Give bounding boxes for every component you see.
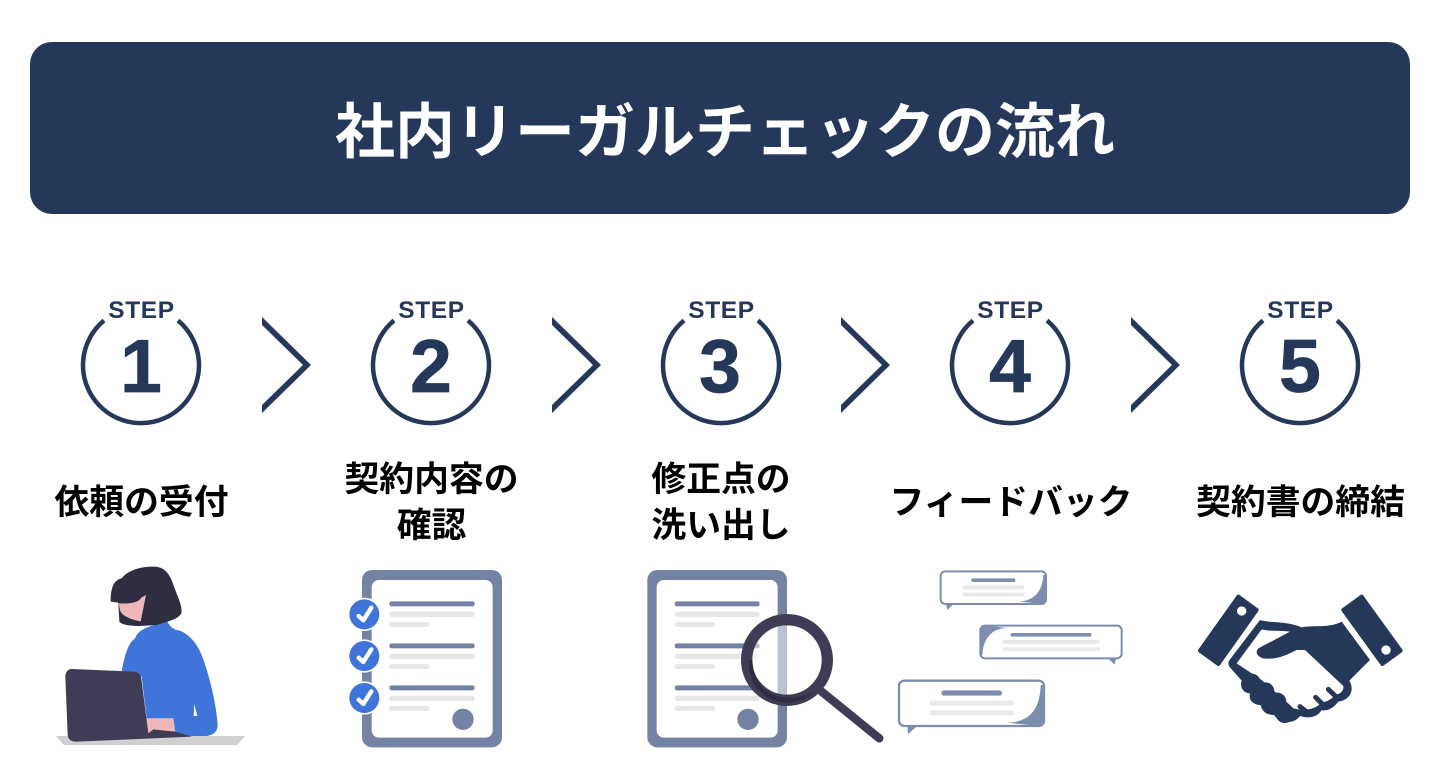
step 3 badge: 3 bbox=[699, 324, 741, 408]
label: step 2: 契約内容の bbox=[344, 460, 518, 499]
step 2 badge bbox=[373, 297, 489, 423]
icon: document with magnifier bbox=[647, 570, 879, 747]
bubble top bbox=[941, 571, 1046, 610]
step 1 badge: STEP bbox=[108, 297, 175, 324]
step 4 badge: STEP bbox=[977, 297, 1044, 324]
label: step 3: 洗い出し bbox=[651, 506, 791, 545]
step 1 badge bbox=[83, 297, 199, 423]
label: step 4: フィードバック bbox=[890, 483, 1132, 522]
label: step 5: 契約書の締結 bbox=[1196, 483, 1405, 522]
step 3 badge bbox=[663, 297, 779, 423]
icon: person at laptop bbox=[56, 567, 245, 745]
label: step 3: 修正点の bbox=[651, 460, 791, 499]
bubble middle bbox=[980, 626, 1122, 665]
icon: checklist document bbox=[348, 570, 502, 747]
step 5 badge bbox=[1242, 297, 1358, 423]
icon: handshake bbox=[1200, 597, 1401, 723]
icon: chat bubbles bbox=[899, 571, 1122, 734]
arrow 4 bbox=[1131, 317, 1180, 413]
arrow 1 bbox=[262, 317, 311, 413]
label: step 1: 依頼の受付 bbox=[54, 483, 228, 522]
step 5 badge: STEP bbox=[1267, 297, 1334, 324]
step 3 badge: STEP bbox=[688, 297, 755, 324]
bubble bottom bbox=[899, 681, 1045, 734]
label: step 2: 確認 bbox=[397, 506, 466, 545]
step 1 badge: 1 bbox=[120, 324, 162, 408]
arrow 3 bbox=[841, 317, 890, 413]
step 2 badge: 2 bbox=[410, 324, 452, 408]
title banner bbox=[30, 42, 1410, 214]
step 5 badge: 5 bbox=[1279, 324, 1321, 408]
step 4 badge bbox=[952, 297, 1068, 423]
step 2 badge: STEP bbox=[398, 297, 465, 324]
title: 社内リーガルチェックの流れ bbox=[335, 99, 1115, 166]
arrow 2 bbox=[552, 317, 601, 413]
step 4 badge: 4 bbox=[989, 324, 1031, 408]
